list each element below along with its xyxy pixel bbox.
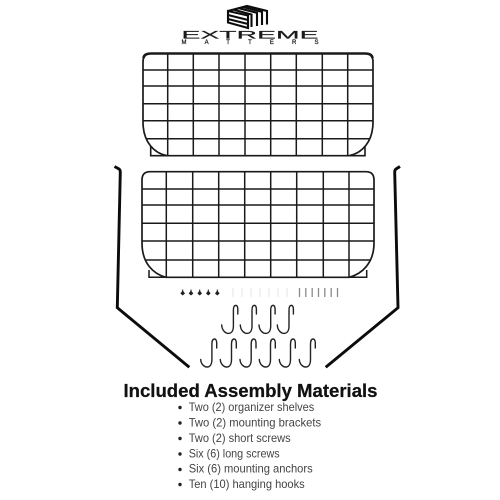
long screws <box>300 288 338 297</box>
list item: long screws: Six (6) long screws <box>189 446 280 460</box>
materials list <box>178 400 321 491</box>
mounting bracket: right <box>326 166 400 367</box>
logo wordmark: EXTREME: EXTREME <box>182 29 318 41</box>
mounting bracket: left <box>114 166 189 367</box>
logo wordmark: MATTERS: MATTERS <box>182 40 318 46</box>
list item: shelves: Two (2) organizer shelves <box>189 400 314 414</box>
list item: anchors: Six (6) mounting anchors <box>189 462 313 476</box>
list item: brackets: Two (2) mounting brackets <box>189 416 321 430</box>
hanging hooks: top row <box>222 305 293 333</box>
organizer shelf: top grid <box>143 54 373 156</box>
logo: Extreme Matters <box>182 6 318 46</box>
list item: short screws: Two (2) short screws <box>189 431 291 445</box>
mounting anchors <box>233 288 287 297</box>
short screws <box>180 290 220 296</box>
heading: Included Assembly Materials <box>124 380 378 401</box>
icon: logo box <box>228 6 267 28</box>
list item: hooks: Ten (10) hanging hooks <box>189 477 305 491</box>
organizer shelf: bottom grid <box>142 172 374 277</box>
hanging hooks: bottom row <box>201 339 315 367</box>
